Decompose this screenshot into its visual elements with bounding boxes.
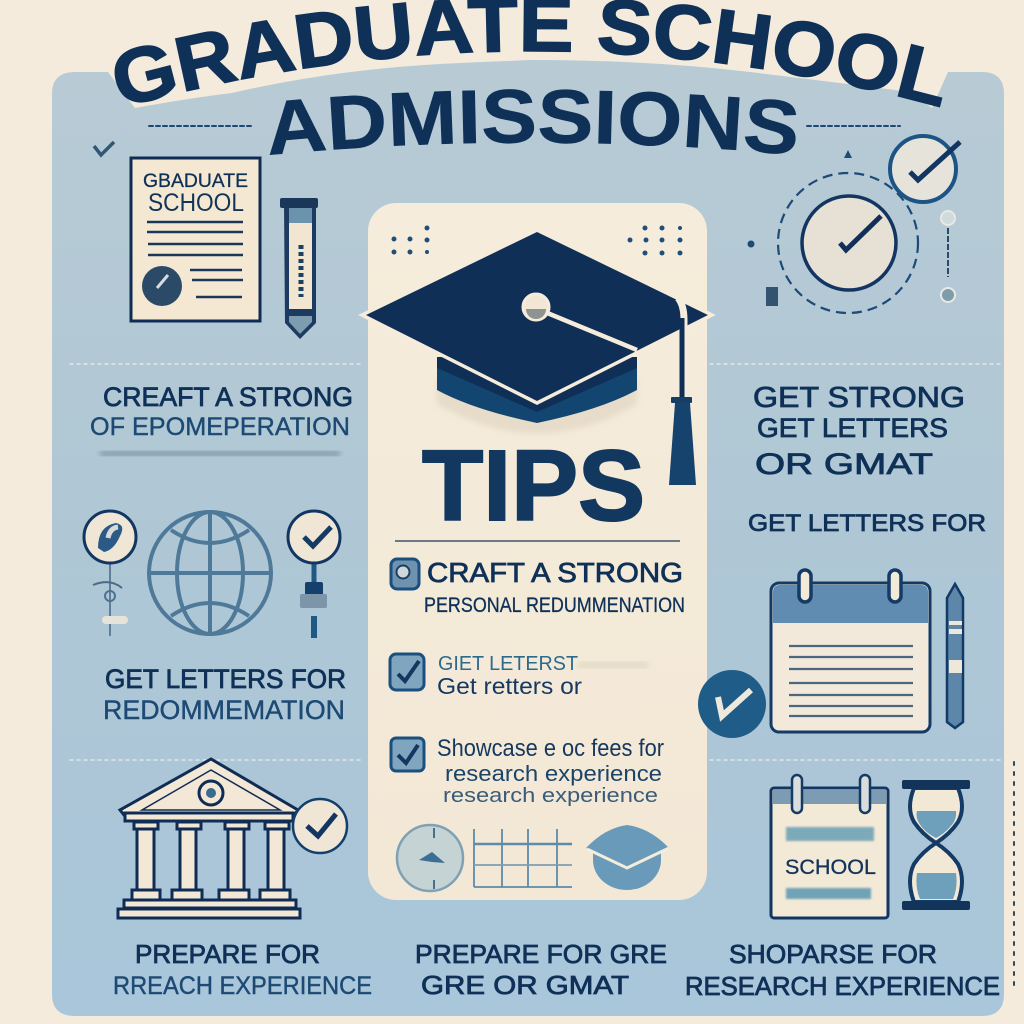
checklist item 2: GIET LETERST bbox=[438, 653, 578, 675]
text block: right top bbox=[748, 382, 986, 537]
icon: graduate school document bbox=[131, 158, 260, 321]
label: showcase research: SHOPARSE FOR bbox=[729, 939, 937, 969]
checklist item 1: CRAFT A STRONG bbox=[427, 557, 683, 588]
text block: get letters: GET LETTERS FOR bbox=[105, 664, 346, 694]
icon: school calendar bbox=[771, 775, 888, 918]
dividers bbox=[70, 126, 1014, 990]
heading: TIPS: TIPS bbox=[422, 430, 645, 542]
text block: get letters: REDOMMEMATION bbox=[103, 695, 345, 725]
icon: small check top left bbox=[94, 142, 114, 155]
icon: globe bbox=[149, 512, 271, 634]
text block: right top: GET LETTERS bbox=[757, 413, 948, 443]
checklist item 2: Get retters or bbox=[437, 673, 582, 699]
checklist item 1: PERSONAL REDUMMENATION bbox=[424, 594, 685, 617]
text block: get letters bbox=[103, 664, 346, 725]
checklist item 1 bbox=[391, 557, 685, 617]
divider bbox=[395, 540, 680, 542]
icon: pin right with check bbox=[288, 511, 340, 638]
label: showcase research bbox=[685, 939, 1000, 1001]
text block: right top: GET LETTERS FOR bbox=[748, 510, 986, 537]
checklist item 3: research experience bbox=[445, 761, 662, 786]
title: ADMISSIONS bbox=[270, 89, 796, 155]
panel: central tips card bbox=[362, 203, 712, 900]
text block: right top: GET STRONG bbox=[753, 382, 965, 414]
icon: temple check badge bbox=[293, 799, 347, 853]
label: prepare research bbox=[113, 939, 372, 1000]
label: prepare research: PREPARE FOR bbox=[135, 939, 320, 969]
icon: pen bbox=[947, 584, 963, 728]
label: prepare research: RREACH EXPERIENCE bbox=[113, 972, 372, 1000]
icon: table grid bbox=[474, 829, 572, 887]
decorative dots bbox=[392, 226, 682, 256]
icon: test tube bbox=[280, 198, 318, 339]
icon: calendar check badge bbox=[698, 670, 766, 738]
checklist item 2 bbox=[390, 653, 648, 699]
label: prepare gre bbox=[415, 939, 667, 1000]
text block: left top: OF EPOMEPERATION bbox=[90, 413, 350, 441]
text block: right top: OR GMAT bbox=[755, 448, 933, 481]
text block: left top: CREAFT A STRONG bbox=[103, 382, 353, 412]
checklist item 3: research experience bbox=[443, 785, 658, 807]
icon: graduate school document: SCHOOL bbox=[148, 189, 244, 217]
icon: graduation cap bbox=[362, 230, 712, 485]
icon: pin left bbox=[84, 511, 136, 636]
icon: school calendar: SCHOOL bbox=[785, 856, 876, 879]
icon: small cap bbox=[586, 825, 669, 890]
label: prepare gre: GRE OR GMAT bbox=[421, 970, 629, 1000]
checklist item 3: Showcase e oc fees for bbox=[437, 735, 664, 762]
label: prepare gre: PREPARE FOR GRE bbox=[415, 939, 667, 969]
icon: graduate school document: GBADUATE bbox=[143, 171, 248, 192]
icon: target with checks bbox=[748, 136, 960, 313]
checklist item 3 bbox=[391, 735, 664, 807]
text block: left top bbox=[90, 382, 353, 456]
icon: temple bbox=[118, 759, 300, 918]
icon: hourglass bbox=[902, 780, 970, 910]
label: showcase research: RESEARCH EXPERIENCE bbox=[685, 971, 1000, 1001]
icon: calendar bbox=[771, 570, 930, 732]
icon: clock bbox=[397, 825, 463, 891]
